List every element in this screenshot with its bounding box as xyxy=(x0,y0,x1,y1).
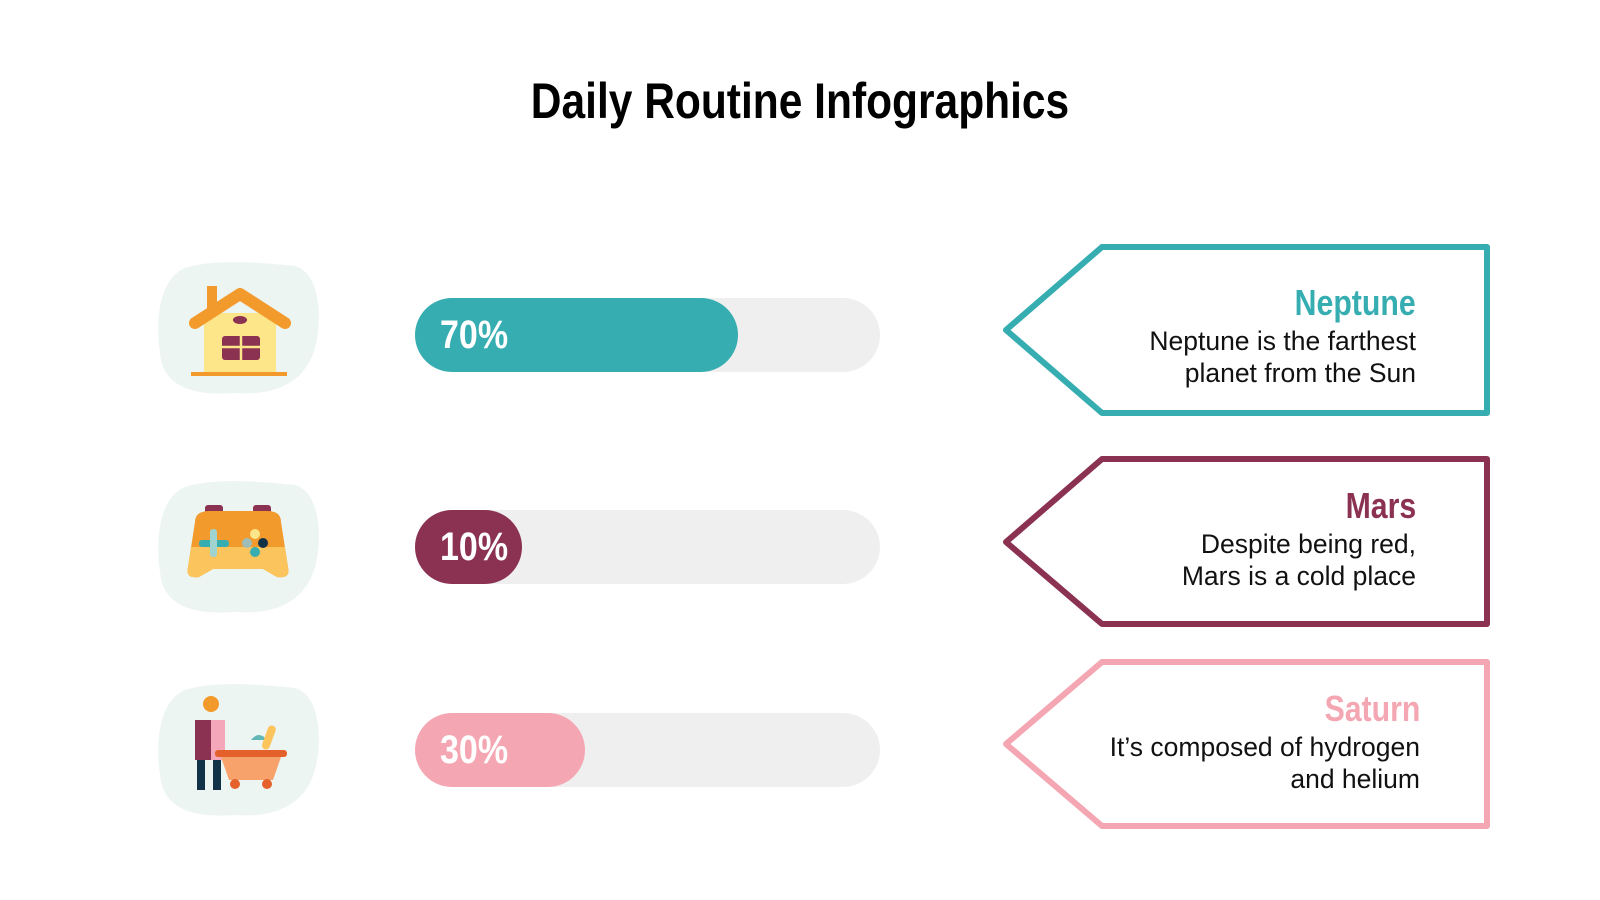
text: Saturn: It’s composed of hydrogen xyxy=(1110,732,1420,762)
text: Mars: Despite being red, xyxy=(1201,529,1416,559)
text: Neptune xyxy=(1149,282,1416,388)
text: Mars: Mars is a cold place xyxy=(1182,561,1416,591)
bar: 30% xyxy=(415,713,880,787)
text: Saturn xyxy=(1110,688,1420,794)
text: Saturn: Saturn xyxy=(1324,688,1420,729)
bar: 10% xyxy=(415,510,880,584)
bar: 10%: 10% xyxy=(440,525,508,569)
text: Neptune: planet from the Sun xyxy=(1185,358,1416,388)
icon: house xyxy=(158,262,319,394)
title: Daily Routine Infographics xyxy=(531,73,1069,129)
text: Mars xyxy=(1182,485,1416,591)
icon: game controller xyxy=(158,481,319,612)
bar: 70%: 70% xyxy=(440,313,508,357)
text: Saturn: and helium xyxy=(1290,764,1420,794)
bar: 70% xyxy=(415,298,880,372)
text: Neptune: Neptune xyxy=(1295,282,1416,323)
icon: shopping person xyxy=(158,684,319,816)
text: Mars: Mars xyxy=(1345,485,1416,526)
bar: 30%: 30% xyxy=(440,728,508,772)
text: Neptune: Neptune is the farthest xyxy=(1149,326,1416,356)
